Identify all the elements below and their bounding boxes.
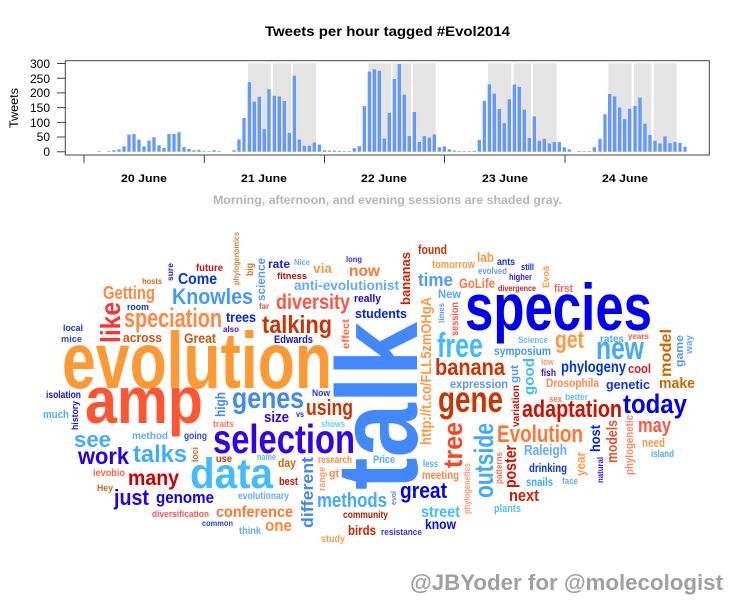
word cloud: less	[423, 459, 438, 470]
word cloud: species	[465, 270, 652, 344]
word cloud: mice	[61, 334, 82, 345]
word cloud: common	[202, 519, 233, 528]
word cloud: amp	[85, 363, 203, 437]
word cloud: ants	[497, 257, 515, 268]
word cloud: genetic	[606, 377, 650, 392]
word cloud: Knowles	[172, 284, 253, 309]
y axis labels: 300	[30, 57, 50, 71]
word cloud	[43, 232, 695, 545]
word cloud: years	[628, 331, 649, 341]
word cloud: talking	[262, 311, 332, 339]
word cloud: study	[321, 533, 345, 545]
word cloud: get	[555, 326, 585, 354]
word cloud: conference	[216, 504, 293, 521]
word cloud: far	[259, 302, 269, 311]
word cloud: genome	[156, 488, 214, 507]
word cloud: loci	[190, 447, 201, 462]
word cloud: know	[425, 516, 456, 532]
word cloud: name	[257, 452, 276, 462]
word cloud: divergence	[498, 283, 536, 293]
word cloud: island	[651, 449, 674, 460]
word cloud: work	[77, 443, 129, 469]
word cloud: good	[521, 358, 538, 395]
word cloud: data	[190, 450, 274, 498]
word cloud: local	[63, 323, 83, 334]
word cloud: New	[438, 287, 462, 301]
word cloud: research	[318, 455, 352, 466]
word cloud: tomorrow	[432, 259, 475, 271]
word cloud: hosts	[142, 276, 162, 286]
word cloud: rates	[600, 333, 624, 345]
word cloud: way	[684, 335, 694, 355]
word cloud: next	[509, 486, 539, 505]
word cloud: rate	[268, 257, 290, 271]
word cloud: vs	[296, 410, 304, 419]
word cloud: best	[279, 476, 298, 488]
word cloud: outside	[469, 423, 499, 498]
word cloud: via	[313, 260, 332, 276]
word cloud: students	[355, 306, 407, 321]
word cloud: now	[349, 263, 381, 280]
word cloud: fitness	[277, 271, 307, 282]
word cloud: effect	[341, 318, 352, 349]
word cloud: evolved	[478, 266, 507, 276]
shaded session bands	[248, 63, 677, 152]
x axis day labels: 22 June	[361, 173, 407, 185]
word cloud: Come	[178, 271, 217, 288]
word cloud: big	[245, 263, 256, 276]
word cloud: gt	[329, 468, 339, 480]
word cloud: shows	[321, 419, 345, 429]
word cloud: plants	[494, 503, 521, 515]
word cloud: free	[437, 327, 483, 365]
word cloud: tree	[438, 422, 468, 468]
word cloud: gut	[509, 365, 521, 383]
word cloud: snails	[526, 475, 553, 489]
word cloud: evolutionary	[238, 491, 289, 502]
word cloud: Raleigh	[524, 442, 567, 459]
word cloud: trees	[226, 309, 256, 325]
plot frame	[65, 61, 709, 155]
word cloud: http://t.co/FLL5zmOHgA	[418, 297, 435, 445]
word cloud: natural	[596, 457, 605, 483]
word cloud: resistance	[381, 527, 422, 538]
word cloud: session	[450, 302, 461, 336]
word cloud: high	[212, 392, 228, 417]
watermark credit: @JBYoder for @molecologist	[410, 570, 724, 595]
word cloud: talks	[133, 441, 187, 468]
word cloud: community	[343, 510, 388, 521]
x axis day labels: 24 June	[602, 173, 648, 185]
word cloud: Getting	[103, 283, 155, 303]
word cloud: expression	[450, 377, 508, 391]
word cloud: Great	[184, 330, 216, 346]
word cloud: really	[354, 293, 382, 305]
word cloud: symposium	[494, 344, 551, 358]
word cloud: meeting	[422, 468, 459, 482]
word cloud: across	[123, 330, 162, 345]
word cloud: GoLife	[459, 275, 495, 291]
word cloud: method	[132, 430, 168, 442]
word cloud: anti-evolutionist	[294, 277, 399, 293]
word cloud: sex	[549, 394, 563, 405]
word cloud: evol	[391, 491, 398, 505]
word cloud: time	[418, 270, 453, 290]
axis ticks	[57, 64, 565, 163]
y axis labels: 150	[30, 101, 50, 115]
word cloud: history	[70, 401, 80, 430]
word cloud: speciation	[124, 303, 222, 333]
word cloud: room	[127, 302, 149, 313]
word cloud: evolution	[62, 316, 332, 405]
word cloud: better	[565, 392, 588, 402]
word cloud: street	[421, 504, 461, 521]
y axis labels	[30, 57, 50, 159]
x axis day labels	[121, 173, 648, 185]
word cloud: birds	[348, 522, 376, 538]
word cloud: times	[437, 302, 446, 323]
word cloud: Nice	[294, 258, 311, 267]
word cloud: using	[306, 395, 353, 420]
word cloud: selection	[213, 416, 355, 462]
word cloud: like	[95, 302, 126, 343]
word cloud: game	[674, 335, 686, 367]
word cloud: science	[254, 258, 268, 301]
word cloud: much	[43, 409, 69, 421]
word cloud: isolation	[46, 390, 81, 401]
word cloud: also	[223, 324, 239, 334]
word cloud: phylogenetics	[462, 463, 472, 514]
word cloud: future	[196, 263, 223, 274]
word cloud: may	[638, 415, 672, 437]
word cloud: variation	[511, 385, 522, 427]
word cloud: phylogenomics	[232, 232, 241, 285]
word cloud: one	[265, 516, 292, 535]
word cloud: first	[554, 283, 573, 295]
word cloud: Hey	[97, 483, 114, 494]
word cloud: host	[587, 425, 603, 452]
word cloud: day	[278, 456, 296, 470]
word cloud: sure	[165, 263, 175, 281]
word cloud: model	[658, 329, 675, 377]
x axis day labels: 23 June	[482, 173, 528, 185]
y axis labels: 250	[30, 72, 50, 86]
chart caption: Morning, afternoon, and evening sessions are shaded gray.	[213, 193, 562, 207]
word cloud: fish	[541, 368, 556, 379]
word cloud: diversity	[276, 291, 350, 314]
word cloud: banana	[435, 354, 505, 380]
word cloud: poster	[501, 445, 520, 488]
y axis labels: 100	[30, 116, 50, 130]
hourly bars	[99, 64, 685, 152]
word cloud: diversification	[152, 509, 209, 520]
word cloud: phylogenetic	[624, 415, 636, 475]
word cloud: low	[541, 357, 555, 367]
y axis title: Tweets	[7, 88, 21, 128]
word cloud: found	[418, 242, 447, 257]
word cloud: Now	[312, 388, 331, 399]
word cloud: many	[128, 467, 179, 490]
word cloud: think	[239, 526, 261, 537]
bar chart: tweets per hour	[7, 57, 709, 185]
word cloud: great	[400, 478, 448, 503]
word cloud: today	[623, 389, 687, 419]
word cloud: Evolution	[497, 421, 583, 448]
word cloud: gene	[438, 379, 503, 420]
word cloud: new	[596, 330, 644, 366]
word cloud: need	[642, 435, 665, 450]
word cloud: cool	[628, 361, 651, 376]
word cloud: phylogeny	[561, 359, 626, 376]
word cloud: methods	[317, 490, 387, 512]
word cloud: year	[573, 452, 588, 476]
word cloud: Drosophila	[546, 376, 599, 390]
word cloud: higher	[509, 272, 532, 282]
y axis labels: 50	[37, 130, 50, 144]
word cloud: Edwards	[274, 334, 313, 346]
word cloud: Evoâ	[541, 265, 551, 288]
x axis day labels: 20 June	[121, 173, 167, 185]
word cloud: bananas	[398, 252, 413, 305]
word cloud: lab	[477, 249, 494, 265]
word cloud: going	[184, 431, 207, 442]
y axis labels: 200	[30, 86, 50, 100]
word cloud: Science	[518, 335, 548, 346]
y axis labels: 0	[43, 145, 50, 159]
word cloud: see	[74, 427, 111, 452]
word cloud: talk	[314, 321, 442, 490]
word cloud: adaptation	[522, 396, 622, 423]
word cloud: long	[346, 255, 362, 264]
word cloud: drinking	[529, 461, 567, 475]
word cloud: make	[659, 375, 695, 392]
x axis day labels: 21 June	[241, 173, 287, 185]
word cloud: still	[521, 262, 534, 272]
word cloud: traits	[213, 419, 234, 430]
word cloud: face	[562, 476, 578, 487]
word cloud: just	[113, 485, 150, 510]
title: Tweets per hour tagged #Evol2014	[265, 23, 510, 39]
word cloud: ievobio	[93, 468, 125, 479]
word cloud: patterns	[494, 452, 504, 484]
word cloud: different	[298, 457, 317, 528]
word cloud: genes	[232, 382, 304, 415]
word cloud: Price	[373, 454, 395, 466]
word cloud: use	[216, 454, 232, 465]
word cloud: range	[317, 467, 327, 491]
word cloud: models	[604, 420, 621, 463]
word cloud: size	[264, 409, 289, 426]
